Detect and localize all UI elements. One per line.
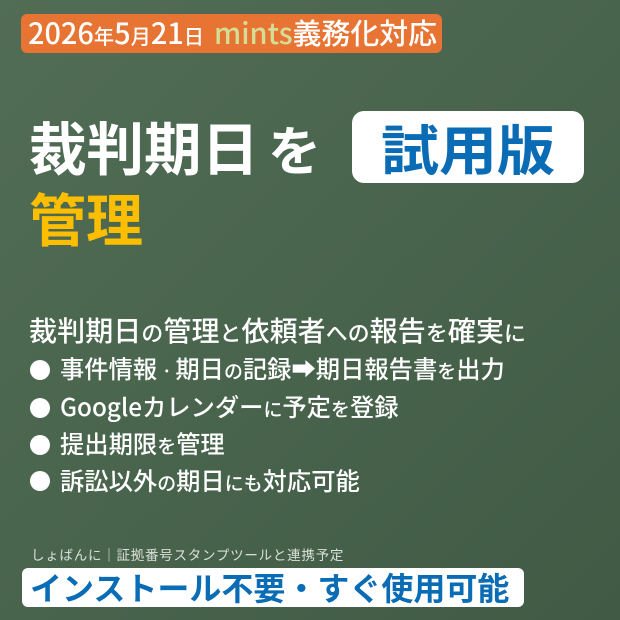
title line 1: 裁判期日を bbox=[29, 103, 321, 187]
feature list bbox=[30, 350, 505, 497]
item 2: Googleカレンダーに予定を登録 bbox=[60, 388, 399, 423]
bullet 2 bbox=[30, 398, 50, 418]
trial badge text: 試用版 bbox=[381, 108, 555, 186]
bullet 4 bbox=[30, 471, 50, 491]
badge text: 2026年5月21日 mints義務化対応 bbox=[28, 11, 437, 53]
bullet 1 bbox=[30, 360, 50, 380]
item 1: 事件情報·期日の記録➡期日報告書を出力 bbox=[60, 350, 505, 385]
banner text: インストール不要・すぐ使用可能 bbox=[30, 564, 509, 610]
subheading: 裁判期日の管理と依頼者への報告を確実に bbox=[29, 310, 526, 350]
trial badge bbox=[352, 111, 584, 183]
bullet 3 bbox=[30, 435, 50, 455]
date badge bbox=[21, 14, 442, 53]
title line 2: 管理 bbox=[29, 176, 143, 258]
bottom banner bbox=[22, 568, 524, 607]
item 4: 訴訟以外の期日にも対応可能 bbox=[60, 462, 360, 497]
item 3: 提出期限を管理 bbox=[60, 425, 225, 460]
small note: しょばんに｜証拠番号スタンプツールと連携予定 bbox=[31, 544, 344, 564]
